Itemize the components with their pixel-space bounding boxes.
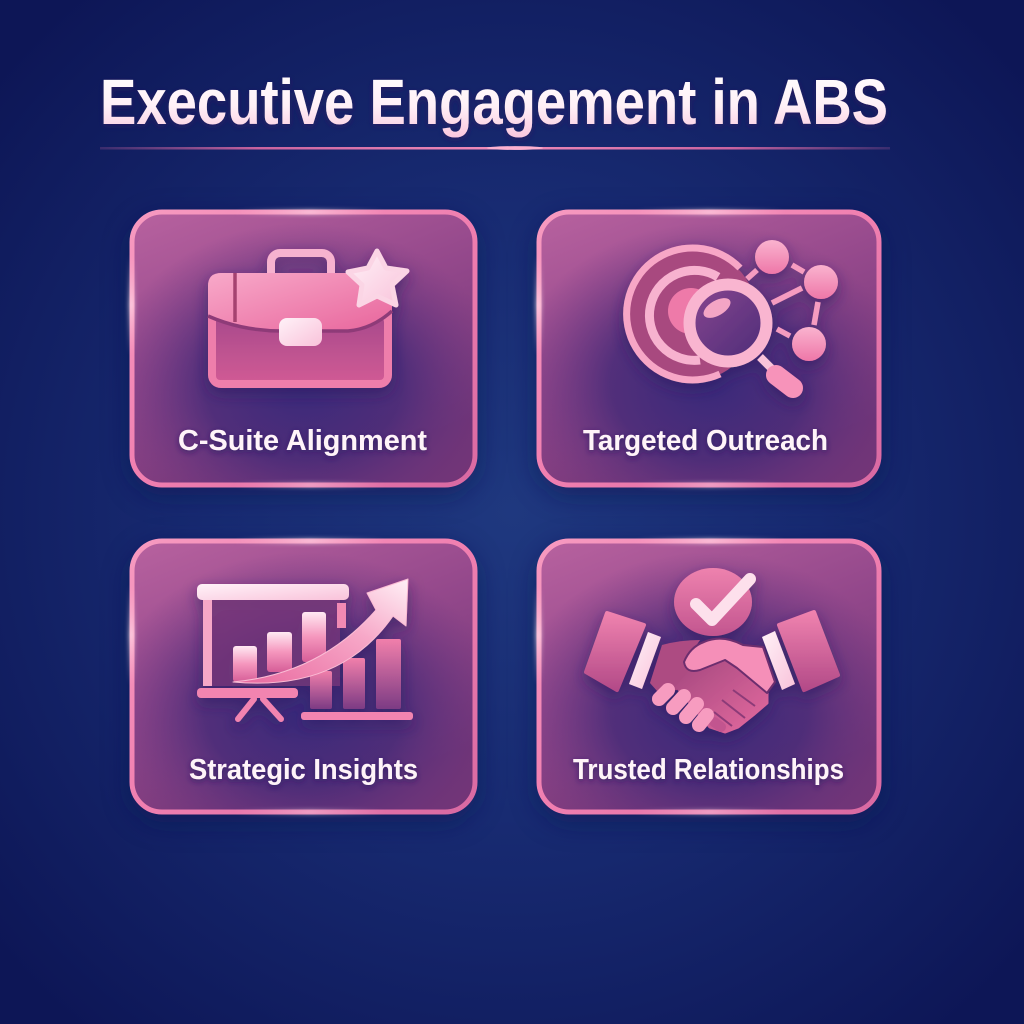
title: Executive Engagement in ABS	[100, 66, 888, 138]
label: C-Suite Alignment	[178, 425, 427, 457]
panel: Targeted Outreach	[536, 210, 881, 495]
label: Strategic Insights	[189, 754, 418, 786]
title underline	[100, 146, 890, 150]
panel: C-Suite Alignment	[129, 210, 477, 495]
panel: Strategic Insights	[129, 539, 477, 822]
panel: Trusted Relationships	[536, 539, 881, 822]
label: Targeted Outreach	[583, 425, 828, 457]
icon: handshake with check badge	[586, 568, 838, 732]
icon: target, magnifier and network	[625, 240, 838, 388]
label: Trusted Relationships	[573, 754, 844, 786]
icon: presentation chart with rising arrow	[197, 579, 413, 720]
icon: briefcase with star	[208, 251, 407, 388]
